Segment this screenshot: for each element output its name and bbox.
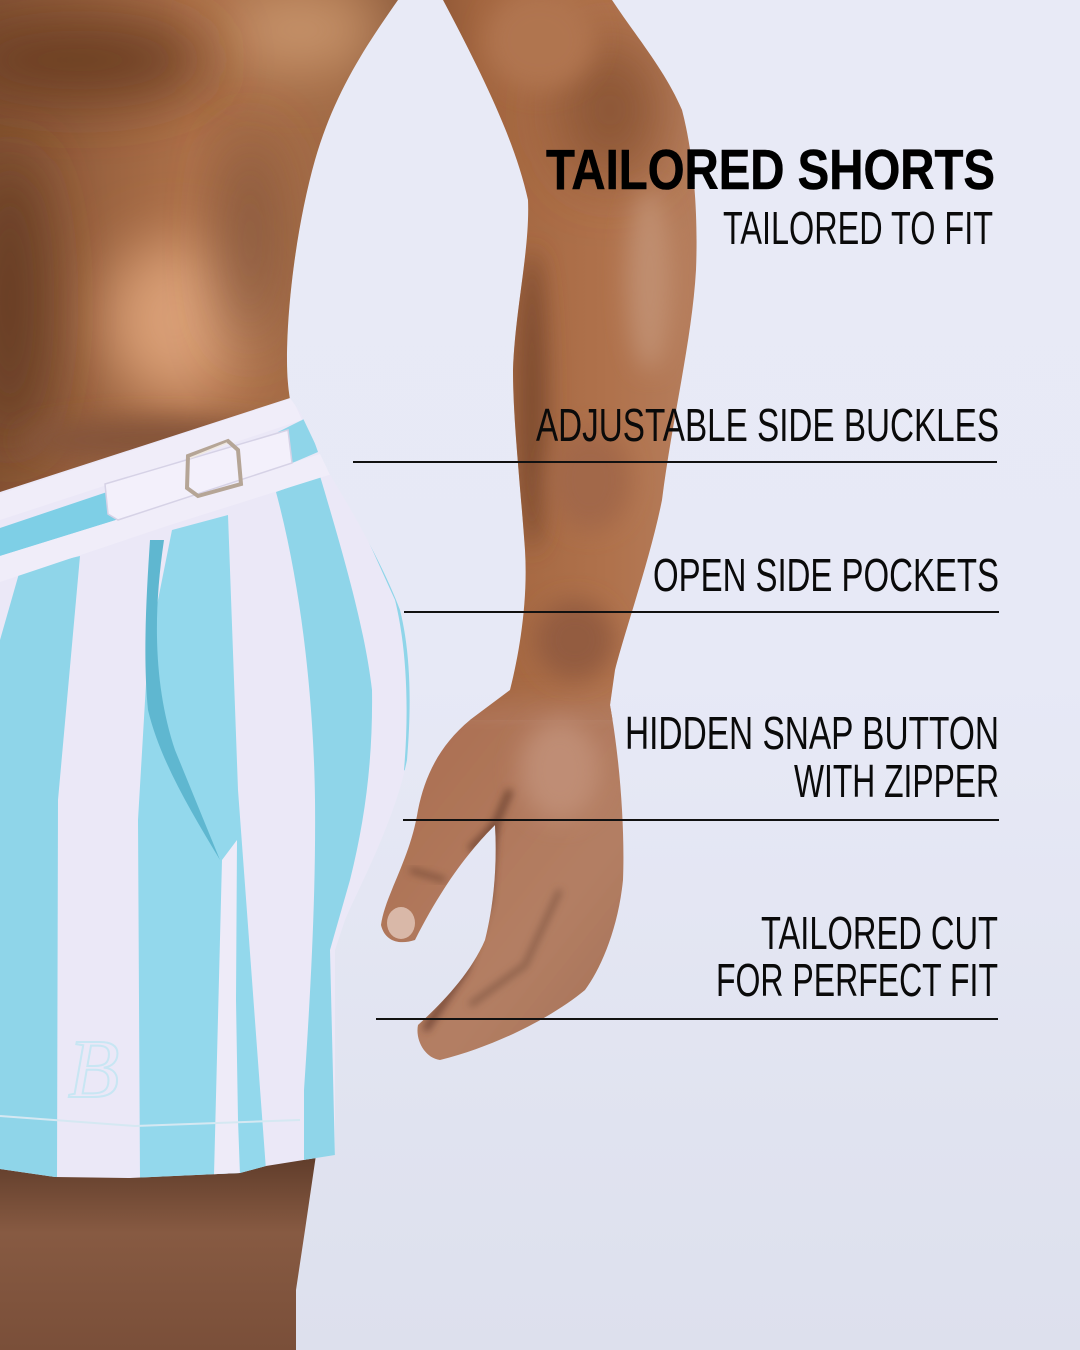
stripe: left: [0, 556, 80, 1180]
waistband: [0, 420, 320, 576]
stripe: pocket panel: [138, 515, 266, 1180]
pocket shadow: [145, 540, 220, 860]
model thigh: [0, 1155, 316, 1350]
title: TAILORED SHORTS: [546, 138, 995, 202]
stripe: waistband right: [278, 418, 318, 464]
stripe: rear edge: [370, 544, 410, 770]
model torso: [0, 0, 398, 492]
buckle: [187, 441, 241, 496]
model arm and hand: [381, 0, 697, 1060]
side seam: [214, 840, 240, 1175]
buckle strap: [105, 430, 292, 520]
fingernail: [387, 907, 415, 939]
stripe: back centre: [276, 476, 372, 1165]
feature: hidden snap button with zipper: [403, 707, 999, 820]
logo: B: [68, 1023, 119, 1116]
hem line: [0, 1116, 300, 1126]
swim shorts: [0, 398, 410, 1178]
feature: tailored cut for perfect fit: [376, 907, 998, 1019]
stripe: waistband left: [0, 490, 116, 556]
